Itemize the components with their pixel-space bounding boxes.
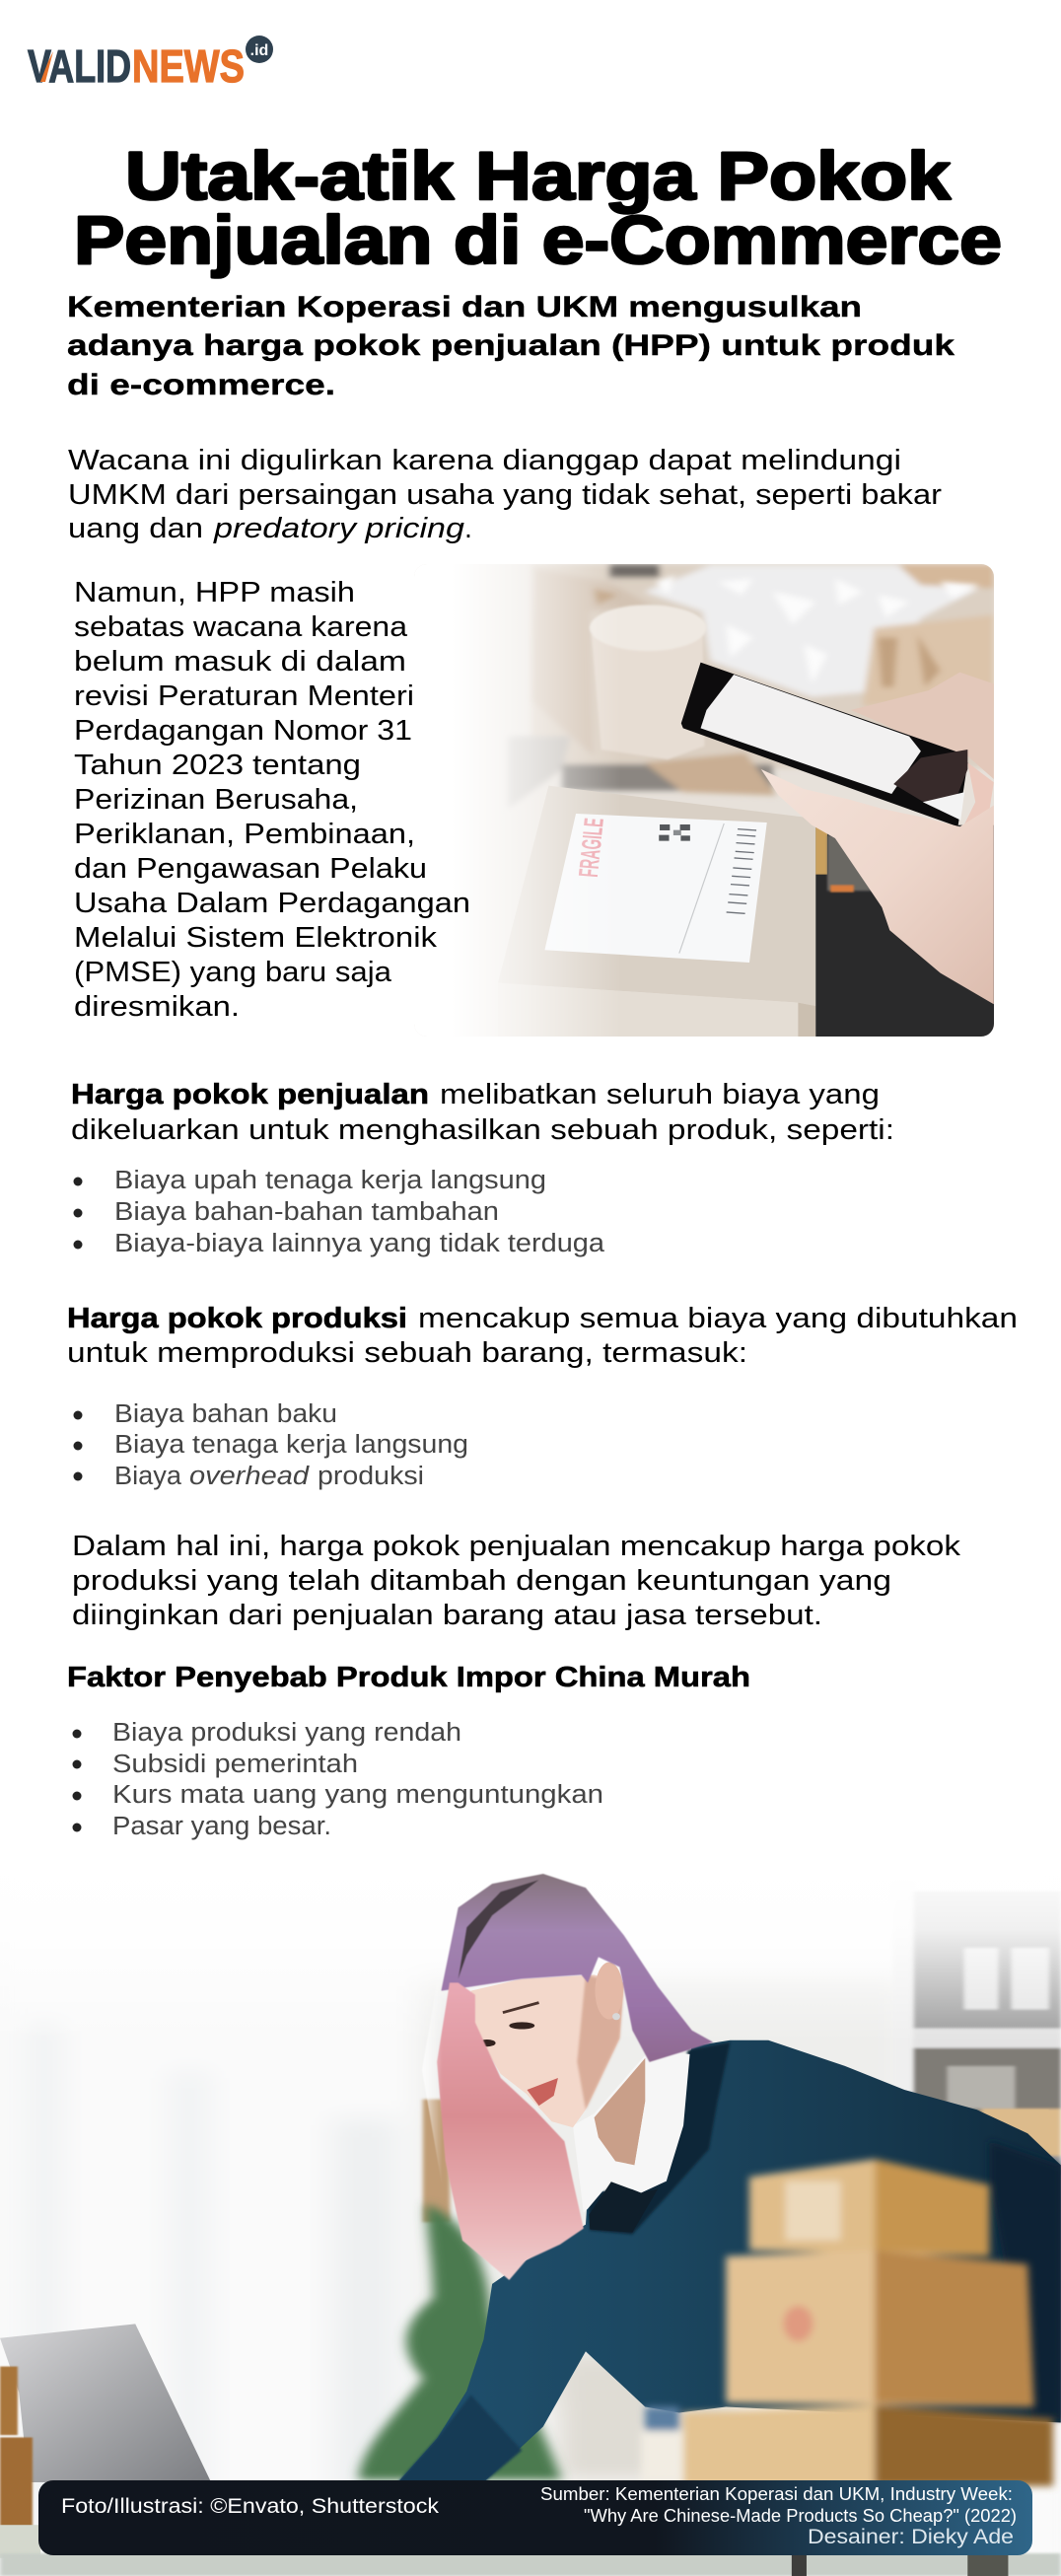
photo credit: Foto/Illustrasi: ©Envato, Shutterstock [61,2495,440,2518]
shipping label: FRAGILE [574,817,609,878]
photo top fade [893,1882,1061,2028]
list: biaya penjualan [73,1167,605,1257]
photo: woman with parcels [0,1853,1061,2576]
intro paragraph: . [464,513,472,544]
parcels [641,2159,1053,2486]
plant [359,2203,562,2480]
photo: phone scanning parcel [414,564,995,1038]
paragraph: Namun, HPP masih wacana: revisi Peraturan Menteri [74,680,414,712]
text block: harga pokok penjualan: melibatkan seluruh biaya yang [440,1079,880,1110]
text block: harga pokok penjualan [71,1079,894,1146]
text block: harga pokok produksi [67,1303,1018,1369]
intro paragraph [68,445,943,544]
face [471,1963,624,2127]
list: biaya penjualan: Biaya bahan-bahan tambahan [114,1198,499,1226]
list: faktor penyebab [73,1719,603,1840]
paragraph: Namun, HPP masih wacana: Perizinan Berusaha, [74,784,358,816]
list: faktor penyebab: Subsidi pemerintah [112,1751,358,1778]
heading: faktor penyebab: Faktor Penyebab Produk Impor China Murah [67,1662,750,1693]
text block: harga pokok produksi: mencakup semua biaya yang dibutuhkan [418,1303,1018,1334]
list: faktor penyebab: Biaya produksi yang rendah [112,1719,461,1747]
text block: harga pokok produksi: Harga pokok produksi [67,1303,407,1334]
list: biaya produksi: produksi [318,1463,424,1490]
paragraph: kesimpulan: produksi yang telah ditambah dengan keuntungan yang [72,1565,891,1597]
list: biaya produksi: Biaya [114,1463,182,1490]
paragraph: kesimpulan: Dalam hal ini, harga pokok penjualan mencakup harga pokok [72,1531,961,1562]
subheading [67,291,955,401]
logo: Validnews.id: .id [250,42,268,59]
paragraph: Namun, HPP masih wacana: belum masuk di dalam [74,646,406,678]
paragraph: Namun, HPP masih wacana: sebatas wacana karena [74,611,407,643]
paragraph: kesimpulan: diinginkan dari penjualan barang atau jasa tersebut. [72,1600,822,1631]
logo: Validnews.id: VALID [28,40,131,92]
hands and phone [681,663,994,1004]
paragraph: Namun, HPP masih wacana: Usaha Dalam Perdagangan [74,888,470,919]
text block: harga pokok produksi: untuk memproduksi sebuah barang, termasuk: [67,1337,747,1369]
back box [1018,2110,1047,2111]
hair [422,1874,713,2280]
list: biaya produksi [73,1400,468,1490]
subheading: adanya harga pokok penjualan (HPP) untuk produk [67,329,955,362]
photo left fade [414,564,621,1037]
intro paragraph: predatory pricing [213,513,464,544]
intro paragraph: UMKM dari persaingan usaha yang tidak sehat, seperti bakar [68,479,943,511]
paragraph: Namun, HPP masih wacana: diresmikan. [74,991,240,1023]
paragraph: Namun, HPP masih wacana: Perdagangan Nomor 31 [74,715,412,747]
paragraph: Namun, HPP masih wacana: dan Pengawasan Pelaku [74,853,427,885]
title: Utak-atik Harga Pokok [125,138,952,214]
paragraph: Namun, HPP masih wacana: Namun, HPP masih [74,577,355,608]
table [0,2525,1061,2576]
text block: harga pokok penjualan: Harga pokok penjualan [71,1079,429,1110]
title: Penjualan di e-Commerce [74,202,1002,278]
subheading: Kementerian Koperasi dan UKM mengusulkan [67,291,862,323]
credits bar [38,2480,1032,2555]
source [540,2484,1017,2526]
laptop [0,2324,211,2482]
paragraph: kesimpulan [72,1531,961,1631]
shipping label [544,814,767,963]
list: faktor penyebab: Kurs mata uang yang menguntungkan [112,1781,603,1809]
list: biaya produksi: Biaya tenaga kerja langsung [114,1431,468,1459]
parcel box [498,786,815,1038]
source: Sumber: Kementerian Koperasi dan UKM, Industry Week: [540,2484,1013,2504]
shirt collar [573,2050,690,2233]
logo: Validnews.id: NEWS [132,40,245,92]
list: biaya penjualan: Biaya upah tenaga kerja langsung [114,1167,546,1194]
sweater [394,2040,1061,2486]
title [74,138,1002,278]
text block: harga pokok penjualan: dikeluarkan untuk menghasilkan sebuah produk, seperti: [71,1114,894,1146]
boxes on the left [0,2367,33,2528]
designer credit: Desainer: Dieky Ade [808,2526,1014,2548]
woman and parcels [394,1874,1061,2486]
logo: Validnews.id [28,36,273,92]
intro paragraph: Wacana ini digulirkan karena dianggap dapat melindungi [68,445,901,476]
paragraph: Namun, HPP masih wacana: Periklanan, Pembinaan, [74,819,415,850]
list: biaya produksi: Biaya bahan baku [114,1400,337,1428]
subheading: di e-commerce. [67,369,335,401]
list: faktor penyebab: Pasar yang besar. [112,1813,331,1840]
list: biaya produksi: overhead [189,1463,310,1490]
list: biaya penjualan: Biaya-biaya lainnya yang tidak terduga [114,1230,605,1257]
paragraph: Namun, HPP masih wacana: Melalui Sistem Elektronik [74,922,438,954]
source: "Why Are Chinese-Made Products So Cheap?" (2022) [584,2506,1017,2526]
paragraph: Namun, HPP masih wacana [74,577,470,1023]
paragraph: Namun, HPP masih wacana: Tahun 2023 tentang [74,750,361,781]
intro paragraph: uang dan [68,513,203,544]
backdrop: curtain, plant, laptop, table [0,1853,1061,2576]
paragraph: Namun, HPP masih wacana: (PMSE) yang baru saja [74,957,391,988]
